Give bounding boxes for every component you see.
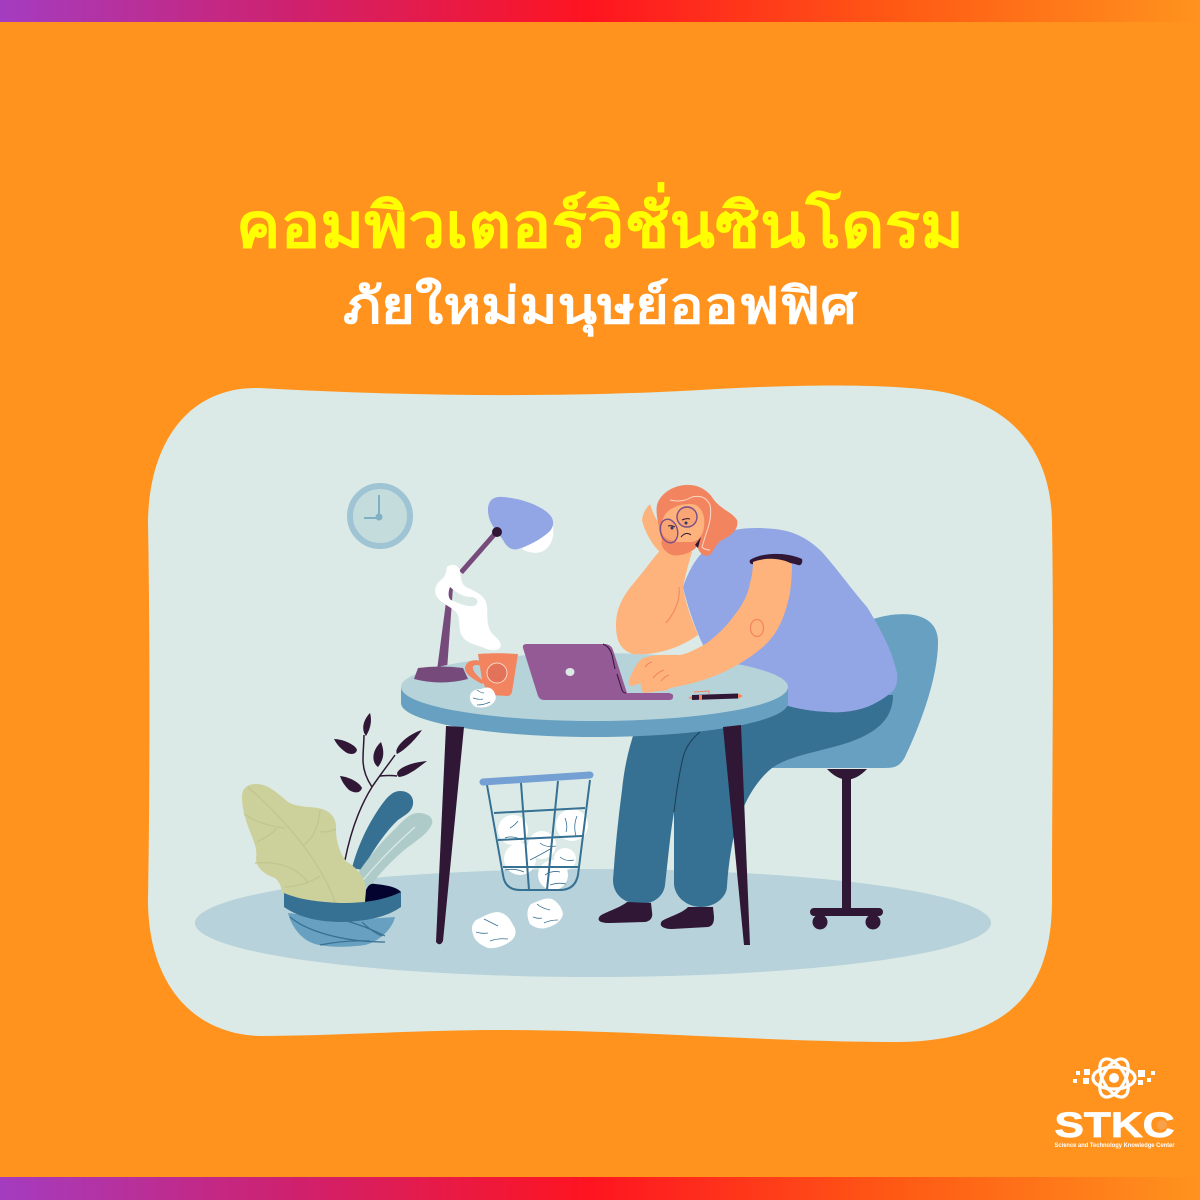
crease on arm xyxy=(666,587,679,623)
chair xyxy=(770,614,938,930)
glasses xyxy=(658,507,697,545)
pot bowl xyxy=(288,913,395,947)
laptop xyxy=(523,644,673,700)
lamp shade xyxy=(488,497,553,549)
plant pot xyxy=(284,884,401,947)
elbow mark xyxy=(750,620,764,636)
lamp shade underside xyxy=(522,525,553,553)
trousers xyxy=(613,695,893,907)
typing arm xyxy=(629,559,792,693)
plant xyxy=(242,713,432,905)
large green leaf xyxy=(242,784,366,905)
face xyxy=(661,504,704,542)
pen xyxy=(688,691,743,700)
right shoe xyxy=(661,907,714,929)
logo tagline: Science and Technology Knowledge Center xyxy=(1054,1143,1175,1149)
desk lamp xyxy=(437,497,553,670)
paper creases xyxy=(505,816,577,885)
pot inside xyxy=(365,884,401,905)
hair strand xyxy=(670,496,711,550)
hair xyxy=(657,485,737,556)
pale leaf xyxy=(358,813,432,890)
plant stems xyxy=(345,735,397,860)
lamp arm xyxy=(437,530,498,670)
coffee mug xyxy=(465,653,518,696)
logo wordmark: STKC xyxy=(1054,1106,1174,1145)
person: head and arms xyxy=(616,485,792,693)
subtitle: ภัยใหม่มนุษย์ออฟฟิศ xyxy=(343,277,858,337)
icon: wall clock xyxy=(350,486,410,546)
logo dot xyxy=(1157,1120,1167,1130)
crease xyxy=(674,732,700,812)
steam from cup xyxy=(435,565,501,650)
knuckle lines xyxy=(645,662,669,681)
lamp joint xyxy=(492,527,502,537)
shirt xyxy=(683,528,897,712)
lamp base xyxy=(414,666,468,682)
title: คอมพิวเตอร์วิชั่นซินโดรม xyxy=(236,182,964,261)
propping arm xyxy=(616,548,698,654)
top gradient bar xyxy=(0,0,1200,22)
eyes and mouth xyxy=(672,523,686,528)
blue leaf xyxy=(352,791,413,870)
person: trousers, shoes and shirt xyxy=(599,528,897,929)
pot lines xyxy=(290,917,385,945)
left shoe xyxy=(599,902,652,923)
crumpled paper inside basket xyxy=(498,809,588,890)
pot rim xyxy=(284,892,401,922)
bottom gradient bar xyxy=(0,1177,1200,1200)
table xyxy=(401,653,788,945)
logo squares xyxy=(1073,1069,1155,1085)
leaf veins xyxy=(244,787,336,902)
crumpled paper on table xyxy=(470,687,496,708)
basket wire xyxy=(487,780,590,890)
logo: STKC xyxy=(1054,1054,1175,1149)
basket rim xyxy=(483,775,590,782)
waste basket xyxy=(483,775,590,890)
panel: illustration background blob xyxy=(148,386,1053,1042)
floor shadow xyxy=(195,869,991,977)
pale leaf highlight xyxy=(363,827,415,880)
hand on cheek xyxy=(642,504,665,552)
neck shadow xyxy=(695,537,701,548)
sleeve opening xyxy=(750,554,802,565)
logo atom xyxy=(1093,1054,1135,1102)
crumpled paper on floor xyxy=(472,899,563,948)
dark leaves xyxy=(334,713,427,792)
